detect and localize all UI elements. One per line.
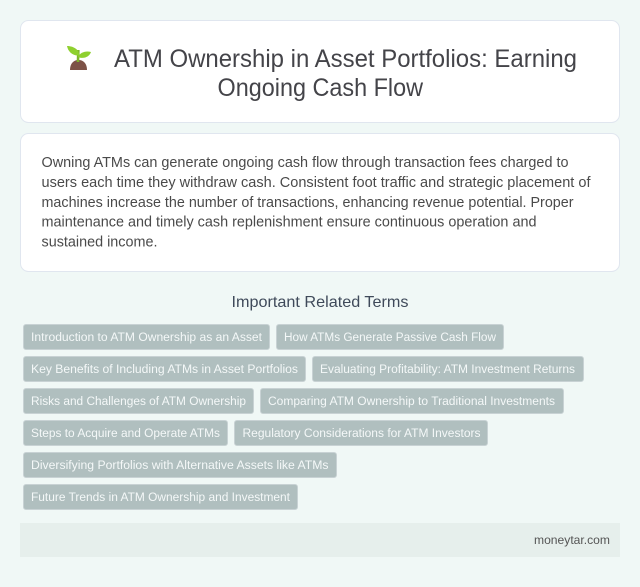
tag: steps: [24, 420, 228, 446]
tag: regulatory: [234, 420, 488, 446]
heading: related terms: Important Related Terms: [232, 294, 408, 311]
text block: description: maintenance and timely cash replenishment ensure continuous operation and: [42, 214, 536, 230]
tag: introduction: [24, 324, 270, 350]
tag: future trends: [24, 484, 298, 510]
tag: diversifying: [24, 452, 336, 478]
text block: description: machines increase the number of transactions, enhancing revenue potential. Proper: [42, 195, 574, 211]
tag: future trends: Future Trends in ATM Ownership and Investment: [31, 490, 291, 504]
tag: diversifying: Diversifying Portfolios with Alternative Assets like ATMs: [31, 458, 328, 472]
footer: [20, 523, 620, 557]
title: Ongoing Cash Flow: [218, 74, 424, 102]
tag: comparing: [260, 388, 564, 414]
tag: risks: Risks and Challenges of ATM Ownership: [31, 394, 246, 408]
title: ATM Ownership in Asset Portfolios: Earning: [114, 45, 577, 73]
panel: description: [20, 134, 620, 272]
tag: passive cash flow: How ATMs Generate Passive Cash Flow: [284, 330, 496, 344]
text block: description: sustained income.: [42, 234, 158, 250]
tag: comparing: Comparing ATM Ownership to Traditional Investments: [268, 394, 555, 408]
tag: key benefits: [24, 356, 306, 382]
tag: evaluating profitability: [312, 356, 584, 382]
text block: description: [42, 155, 591, 250]
tag: risks: [24, 388, 254, 414]
tag: steps: Steps to Acquire and Operate ATMs: [31, 426, 220, 440]
text block: description: Owning ATMs can generate ongoing cash flow through transaction fees charged to: [42, 155, 568, 171]
tag: key benefits: Key Benefits of Including ATMs in Asset Portfolios: [31, 362, 298, 376]
tag list: [24, 324, 584, 510]
tag: passive cash flow: [276, 324, 504, 350]
text block: description: users each time they withdraw cash. Consistent foot traffic and strategic placement of: [42, 175, 591, 191]
footer: site name: moneytar.com: [534, 533, 610, 547]
tag: introduction: Introduction to ATM Ownership as an Asset: [31, 330, 263, 344]
icon: seedling: [67, 46, 91, 70]
tag: regulatory: Regulatory Considerations for ATM Investors: [242, 426, 480, 440]
tag: evaluating profitability: Evaluating Profitability: ATM Investment Returns: [320, 362, 575, 376]
panel: header: [20, 20, 620, 122]
title: [114, 45, 577, 102]
